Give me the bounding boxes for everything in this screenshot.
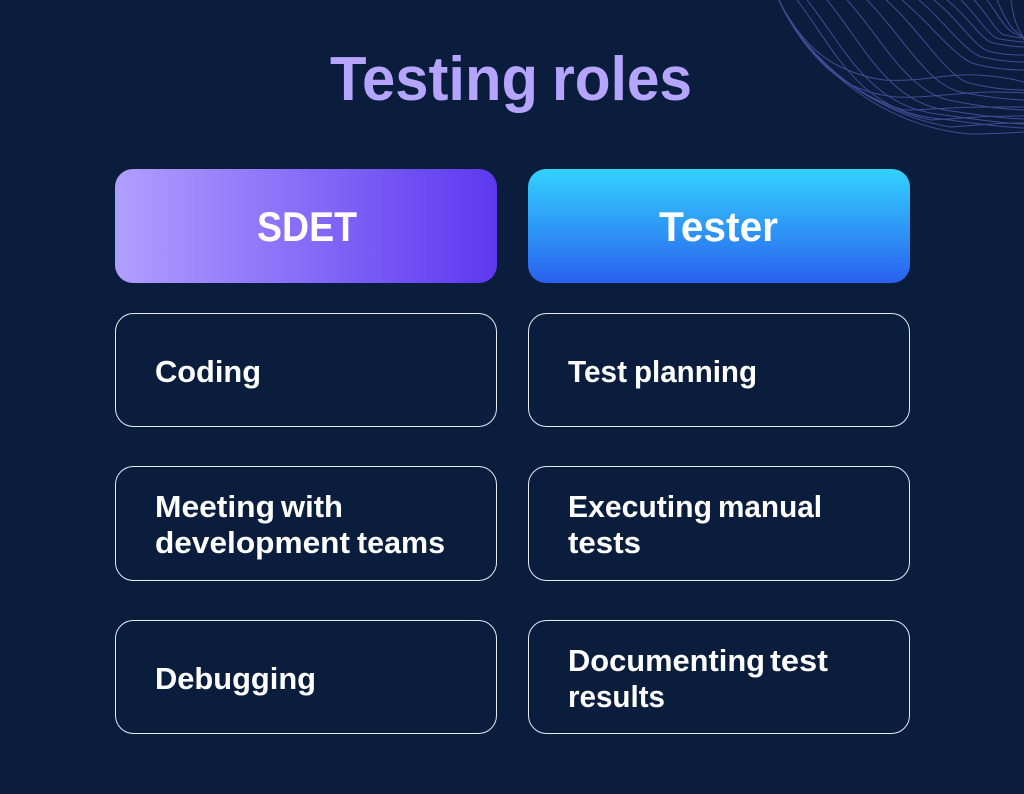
- card: documenting: results: [568, 679, 665, 714]
- title: [330, 45, 692, 114]
- panel: Tester column: [528, 169, 910, 734]
- card: coding: Coding: [155, 354, 261, 389]
- SDET header: [115, 169, 497, 283]
- card: meetings: with: [280, 489, 343, 524]
- card: meetings: [116, 466, 496, 580]
- card: test planning: Test: [568, 354, 627, 389]
- SDET header: SDET: [257, 203, 357, 250]
- card: documenting: Documenting: [568, 643, 765, 678]
- card: manual tests: tests: [568, 525, 641, 560]
- title: roles: [552, 45, 692, 114]
- card: meetings: teams: [357, 525, 445, 560]
- decorative wave mesh: [779, 0, 1024, 134]
- card: debugging: [116, 620, 496, 734]
- card: coding: [116, 314, 496, 426]
- card: debugging: Debugging: [155, 661, 316, 696]
- card: manual tests: [528, 466, 910, 580]
- title: Testing: [330, 45, 538, 114]
- card: test planning: planning: [634, 354, 757, 389]
- panel: SDET column: [115, 169, 497, 734]
- card: manual tests: Executing: [568, 489, 712, 524]
- card: test planning: [528, 314, 910, 426]
- card: meetings: Meeting: [155, 489, 275, 524]
- Tester header: [528, 169, 910, 283]
- card: meetings: development: [155, 525, 350, 560]
- card: documenting: test: [770, 643, 828, 678]
- card: documenting: [528, 620, 910, 734]
- card: manual tests: manual: [718, 489, 822, 524]
- Tester header: Tester: [659, 203, 778, 250]
